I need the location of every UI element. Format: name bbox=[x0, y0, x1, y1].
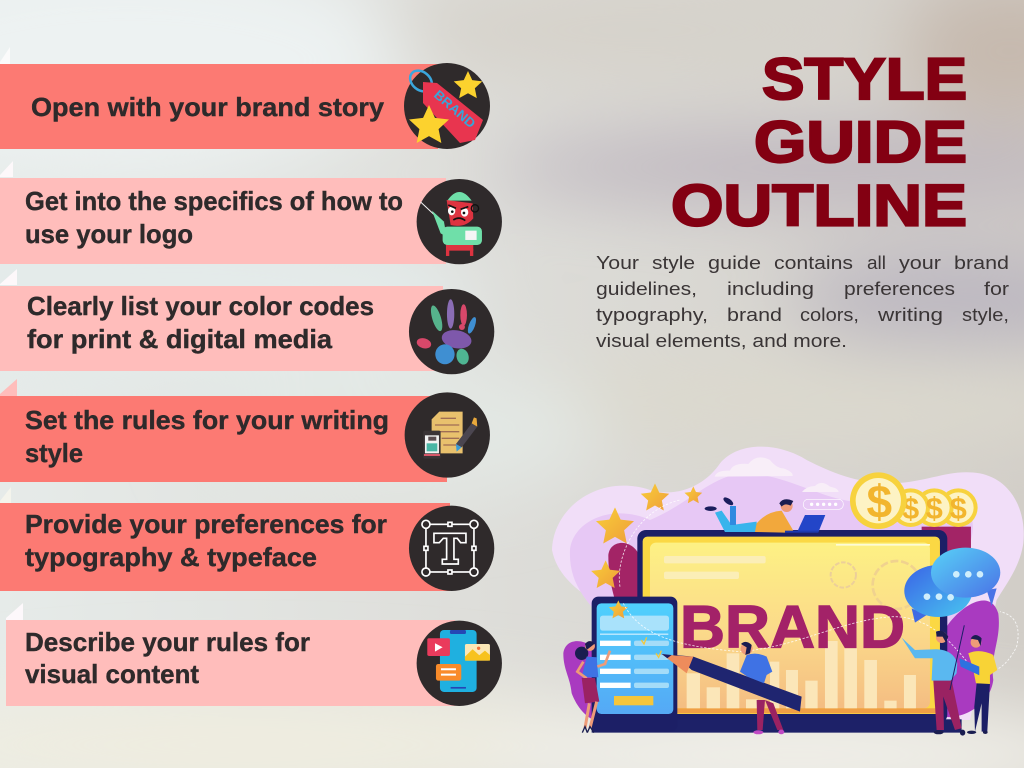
icon: brand tag with stars: BRAND bbox=[431, 87, 479, 131]
intro paragraph: brand bbox=[954, 253, 1009, 273]
man holding tablet bbox=[959, 635, 997, 734]
step 3: colour codes: for print & digital media bbox=[27, 324, 333, 354]
intro paragraph: typography, bbox=[596, 305, 708, 325]
title: GUIDE bbox=[754, 110, 967, 175]
icon: letter T in frame bbox=[409, 506, 494, 591]
step 6: visual content: Describe your rules for bbox=[25, 627, 310, 657]
coins: $ bbox=[867, 475, 892, 527]
intro paragraph: writing bbox=[877, 305, 943, 325]
intro paragraph: style, bbox=[962, 305, 1009, 325]
step 6: visual content bbox=[6, 603, 502, 706]
step 2: logo: use your logo bbox=[25, 219, 193, 249]
step 4: writing style: Set the rules for your writing bbox=[25, 405, 389, 435]
tablet with form bbox=[592, 597, 677, 732]
step 1: brand story: Open with your brand story bbox=[31, 92, 385, 122]
step 5: typography: Provide your preferences for bbox=[25, 509, 387, 539]
person lying on laptop bbox=[705, 496, 825, 533]
maroon shapes behind laptop bbox=[608, 527, 971, 600]
icon: brand tag with stars bbox=[404, 63, 490, 149]
intro paragraph: guide bbox=[708, 253, 761, 273]
illustration: brand marketing scene bbox=[552, 447, 1024, 736]
step 6: visual content: visual content bbox=[25, 659, 199, 689]
icon: phone with media bbox=[417, 621, 502, 706]
man pointing at screen bbox=[902, 625, 965, 736]
title: STYLE bbox=[762, 47, 967, 112]
rating speech tag bbox=[803, 499, 843, 509]
step 5: typography: typography & typeface bbox=[25, 542, 317, 572]
pencil bbox=[662, 654, 802, 712]
background blobs bbox=[552, 447, 1024, 720]
presenter in centre bbox=[740, 642, 784, 734]
coins: $ bbox=[950, 492, 967, 526]
step 2: logo bbox=[0, 161, 502, 264]
intro paragraph: brand bbox=[727, 305, 782, 325]
stars bbox=[591, 483, 702, 618]
step 1: brand story bbox=[0, 47, 490, 149]
BRAND word: BRAND bbox=[680, 592, 905, 660]
intro paragraph: colors, bbox=[800, 305, 859, 325]
step 5: typography bbox=[0, 487, 494, 591]
intro paragraph: contains bbox=[774, 253, 853, 273]
title: OUTLINE bbox=[671, 174, 967, 238]
intro paragraph: for bbox=[984, 279, 1009, 299]
intro paragraph: style bbox=[652, 253, 695, 273]
step 4: writing style bbox=[0, 379, 490, 482]
clouds bbox=[715, 457, 839, 492]
bar chart on screen bbox=[687, 641, 916, 708]
intro paragraph bbox=[596, 253, 1009, 351]
intro paragraph: Your bbox=[596, 253, 639, 273]
step 4: writing style: style bbox=[25, 438, 83, 468]
coins: $ bbox=[902, 492, 919, 526]
intro paragraph: all bbox=[867, 253, 886, 273]
title bbox=[671, 47, 967, 238]
intro paragraph: visual elements, and more. bbox=[596, 331, 847, 351]
step 2: logo: Get into the specifics of how to bbox=[25, 186, 403, 216]
icon: document, phone and pen bbox=[405, 392, 490, 478]
icon: mascot bbox=[417, 179, 502, 264]
intro paragraph: including bbox=[727, 279, 814, 299]
speech bubbles bbox=[904, 548, 1000, 623]
intro paragraph: guidelines, bbox=[596, 279, 697, 299]
step 3: colour codes: Clearly list your color codes bbox=[27, 291, 374, 321]
intro paragraph: your bbox=[899, 253, 941, 273]
purple blobs behind people bbox=[563, 600, 999, 722]
coins: $ bbox=[926, 492, 943, 526]
intro paragraph: preferences bbox=[844, 279, 955, 299]
woman at tablet bbox=[575, 641, 610, 733]
dashed arc bbox=[619, 500, 1018, 672]
icon: colourful hand bbox=[409, 289, 494, 374]
laptop bbox=[592, 530, 962, 733]
coins bbox=[850, 472, 978, 529]
step 3: colour codes bbox=[0, 269, 494, 374]
